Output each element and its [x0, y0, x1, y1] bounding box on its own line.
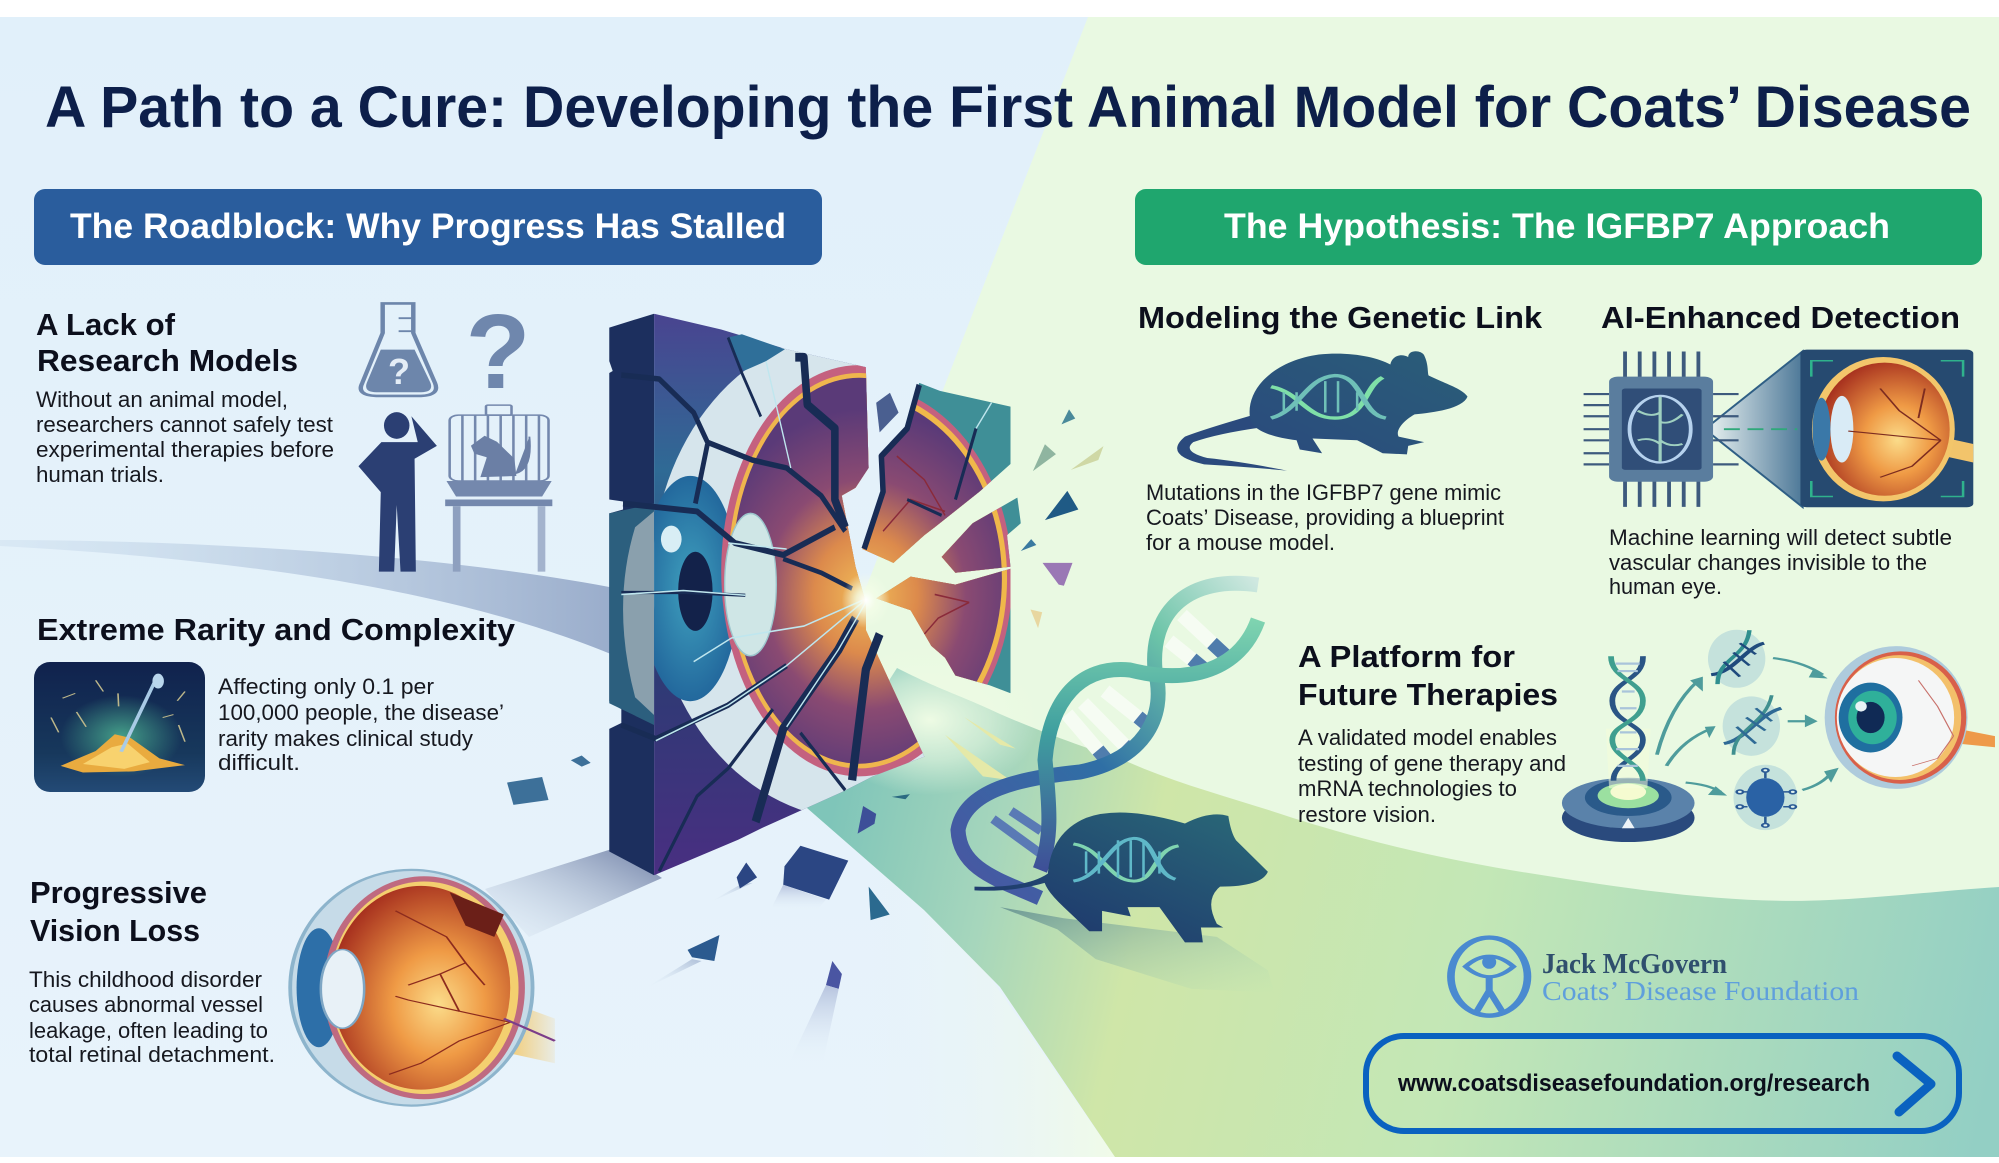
text block: progressive vision loss — [29, 875, 275, 1067]
panel header: hypothesis — [1135, 189, 1982, 265]
text block: lack of research models: researchers cannot safely test — [36, 412, 333, 437]
text block: progressive vision loss: Vision Loss — [30, 913, 200, 948]
text block: extreme rarity — [37, 612, 516, 775]
icon: flask, question mark, researcher, caged mouse: ? — [466, 293, 530, 411]
scan cone — [1705, 352, 1802, 507]
title: A Path to a Cure: Developing the First Animal Model for Coats’ Disease — [45, 75, 1971, 140]
text block: lack of research models: human trials. — [36, 462, 164, 487]
icon: chevron arrow — [1897, 1056, 1931, 1112]
text block: AI-enhanced detection: vascular changes invisible to the — [1609, 550, 1927, 575]
text block: progressive vision loss: causes abnormal vessel — [29, 992, 263, 1017]
text block: extreme rarity: Affecting only 0.1 per — [218, 674, 434, 699]
wall front with eye layers — [654, 314, 924, 876]
text block: modeling the genetic link: Modeling the Genetic Link — [1138, 300, 1543, 335]
text block: AI-enhanced detection: human eye. — [1609, 574, 1722, 599]
text block: progressive vision loss: Progressive — [30, 875, 207, 910]
text block: lack of research models: Research Models — [37, 343, 298, 378]
cracks — [621, 337, 976, 871]
text block: extreme rarity: Extreme Rarity and Complexity — [37, 612, 516, 647]
debris near left side of wall — [507, 755, 591, 805]
DNA in mouse — [1073, 838, 1179, 881]
text block: platform for future therapies: mRNA technologies to — [1298, 776, 1517, 801]
vertical helix — [1611, 656, 1643, 781]
logo: Jack McGovern Coats' Disease Foundation: Coats’ Disease Foundation — [1542, 976, 1860, 1006]
panel header: hypothesis: The Hypothesis: The IGFBP7 Approach — [1224, 207, 1890, 246]
light rays on teal ground — [945, 717, 1016, 780]
blue shard above wall — [728, 334, 785, 371]
text block: platform for future therapies: testing of gene therapy and — [1298, 751, 1566, 776]
text block: AI-enhanced detection: AI-Enhanced Detection — [1601, 300, 1960, 335]
vector circles — [1708, 630, 1797, 830]
mouse body — [974, 813, 1268, 942]
icon: eye cross-section with vessel leakage — [290, 870, 555, 1106]
text block: progressive vision loss: leakage, often leading to — [29, 1018, 268, 1043]
text block: modeling the genetic link: Mutations in the IGFBP7 gene mimic — [1146, 480, 1501, 505]
road shadow behind wall — [0, 540, 625, 660]
wall side face — [609, 314, 654, 875]
chip — [1584, 352, 1739, 507]
light burst — [842, 573, 890, 628]
text block: progressive vision loss: total retinal detachment. — [29, 1042, 275, 1067]
debris small — [580, 757, 910, 834]
text block: lack of research models: experimental therapies before — [36, 437, 334, 462]
icon: mouse with DNA — [1177, 351, 1468, 471]
healthy eye — [1825, 646, 1995, 789]
text block: extreme rarity: rarity makes clinical study — [218, 726, 473, 751]
text block: modeling the genetic link — [1138, 300, 1543, 555]
debris below wall — [644, 846, 890, 1063]
text block: modeling the genetic link: Coats’ Disease, providing a blueprint — [1146, 505, 1504, 530]
right fragments of eye — [862, 383, 1021, 694]
glow column — [1606, 729, 1651, 788]
platform — [1562, 778, 1695, 842]
retina panel — [1800, 350, 1973, 507]
text block: lack of research models — [36, 307, 334, 487]
logo mark — [1451, 938, 1527, 1016]
text block: lack of research models: Without an animal model, — [36, 387, 288, 412]
large mouse with DNA — [974, 813, 1274, 993]
text block: progressive vision loss: This childhood disorder — [29, 967, 262, 992]
arrows — [1657, 658, 1832, 792]
flying shards right — [1021, 409, 1103, 628]
wall with shattered eye — [580, 310, 1103, 883]
icon: therapies delivered to eye — [1562, 630, 1995, 842]
text block: platform for future therapies: restore vision. — [1298, 802, 1436, 827]
text block: AI-enhanced detection: Machine learning will detect subtle — [1609, 525, 1952, 550]
text block: AI-enhanced detection — [1601, 300, 1960, 599]
icon: AI chip scanning retina — [1584, 350, 1973, 507]
URL call-to-action button — [1366, 1036, 1959, 1131]
text block: platform for future therapies: A validated model enables — [1298, 725, 1557, 750]
text block: platform for future therapies — [1298, 639, 1566, 827]
text block: lack of research models: A Lack of — [36, 307, 176, 342]
logo: Jack McGovern Coats' Disease Foundation: Jack McGovern — [1542, 949, 1727, 980]
icon: needle in a haystack — [34, 662, 205, 792]
panel header: roadblock — [34, 189, 822, 265]
text block: platform for future therapies: A Platform for — [1298, 639, 1515, 674]
icon: flask, question mark, researcher, caged mouse — [358, 293, 552, 572]
text block: modeling the genetic link: for a mouse model. — [1146, 530, 1335, 555]
large DNA helix — [958, 583, 1258, 898]
small shard — [876, 393, 899, 432]
text block: platform for future therapies: Future Therapies — [1298, 677, 1558, 712]
text block: extreme rarity: 100,000 people, the disease’ — [218, 700, 504, 725]
text block: extreme rarity: difficult. — [218, 750, 300, 775]
icon: flask, question mark, researcher, caged mouse: ? — [388, 351, 410, 392]
logo: Jack McGovern Coats' Disease Foundation — [1451, 938, 1860, 1016]
wall cast shadow — [485, 848, 662, 937]
URL call-to-action button: www.coatsdiseasefoundation.org/research — [1397, 1070, 1870, 1097]
panel header: roadblock: The Roadblock: Why Progress Has Stalled — [70, 207, 786, 246]
mouse shadow — [1000, 907, 1274, 993]
